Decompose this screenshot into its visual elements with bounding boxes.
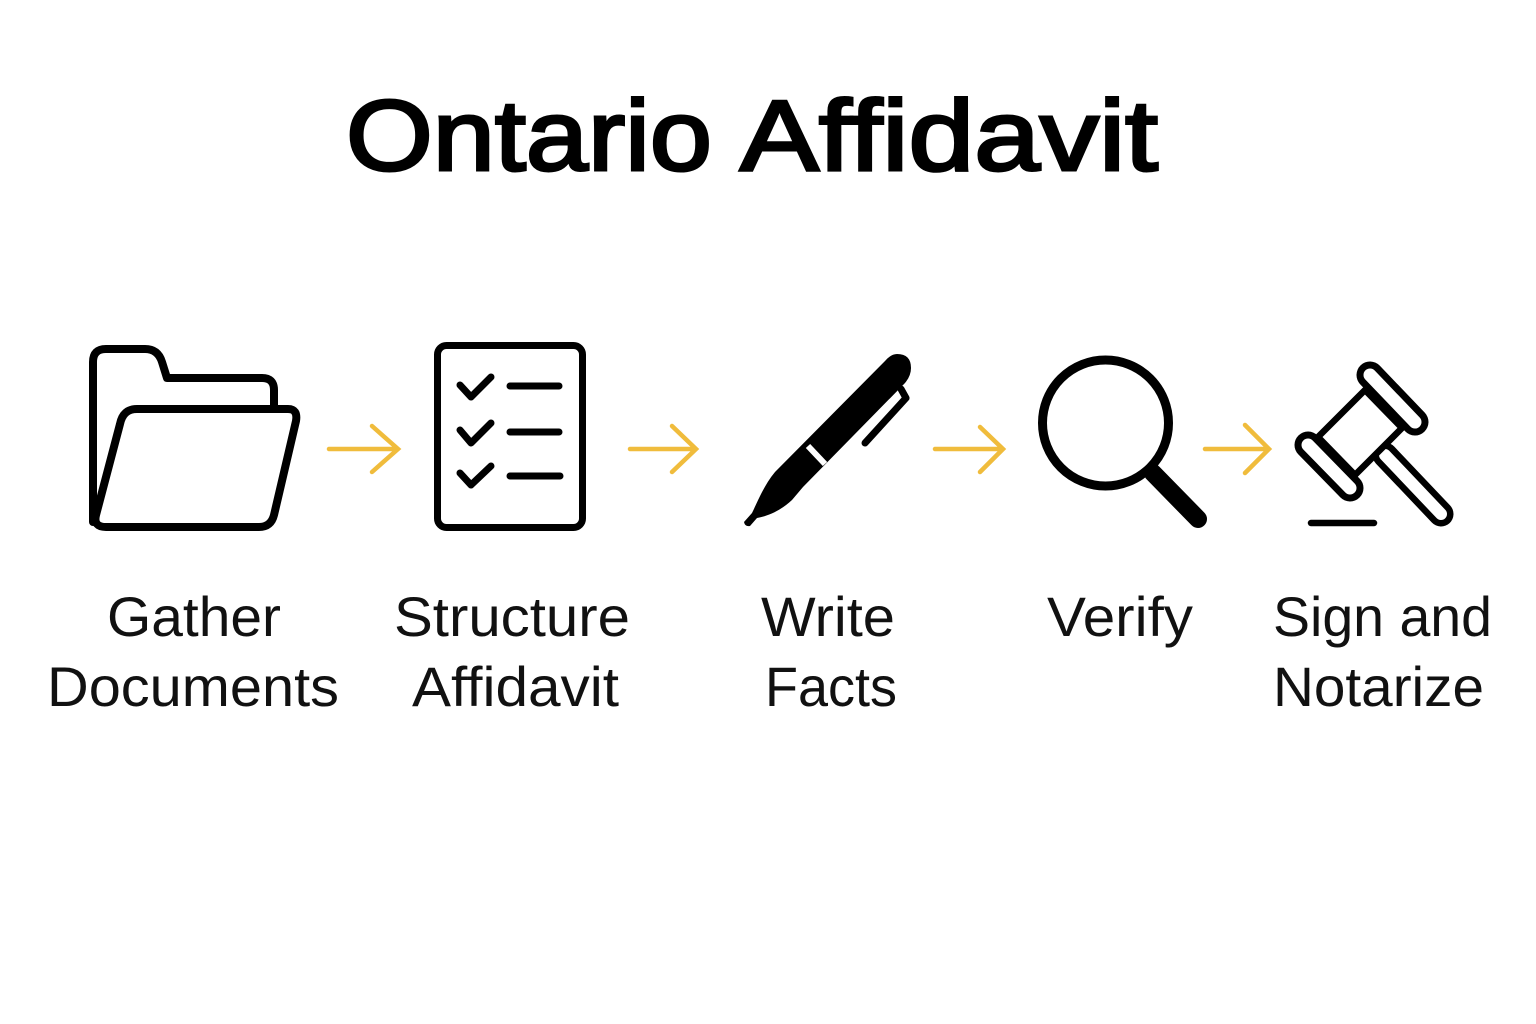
step: write facts: [744, 354, 911, 718]
arrow 3: [935, 427, 1003, 472]
label: gather documents: Gather: [107, 585, 281, 648]
label: write facts: Write: [761, 585, 895, 648]
step: gather documents: [47, 349, 339, 718]
label: gather documents: [47, 585, 339, 718]
arrow 1: [329, 426, 398, 472]
label: structure affidavit: [394, 585, 630, 718]
step: verify: [1042, 360, 1198, 648]
label: structure affidavit: Affidavit: [412, 655, 619, 718]
label: structure affidavit: Structure: [394, 585, 630, 648]
step: structure affidavit: [394, 346, 630, 718]
icon: checklist: [438, 346, 582, 528]
arrow 2: [630, 426, 696, 472]
label: verify: Verify: [1047, 585, 1193, 648]
step: sign and notarize: [1273, 375, 1492, 718]
icon: gavel: [1308, 375, 1441, 523]
label: write facts: [761, 585, 897, 718]
title: Ontario: [346, 80, 712, 192]
icon: pen: [744, 354, 911, 526]
label: gather documents: Documents: [47, 655, 339, 718]
title: [346, 80, 1158, 192]
title: Affidavit: [740, 80, 1158, 192]
label: sign and notarize: Sign and: [1273, 585, 1492, 648]
arrow 4: [1205, 425, 1269, 473]
label: write facts: Facts: [765, 655, 897, 718]
icon: folder: [93, 349, 296, 527]
label: sign and notarize: [1273, 585, 1492, 718]
icon: magnifying glass: [1042, 360, 1198, 519]
label: sign and notarize: Notarize: [1273, 655, 1484, 718]
